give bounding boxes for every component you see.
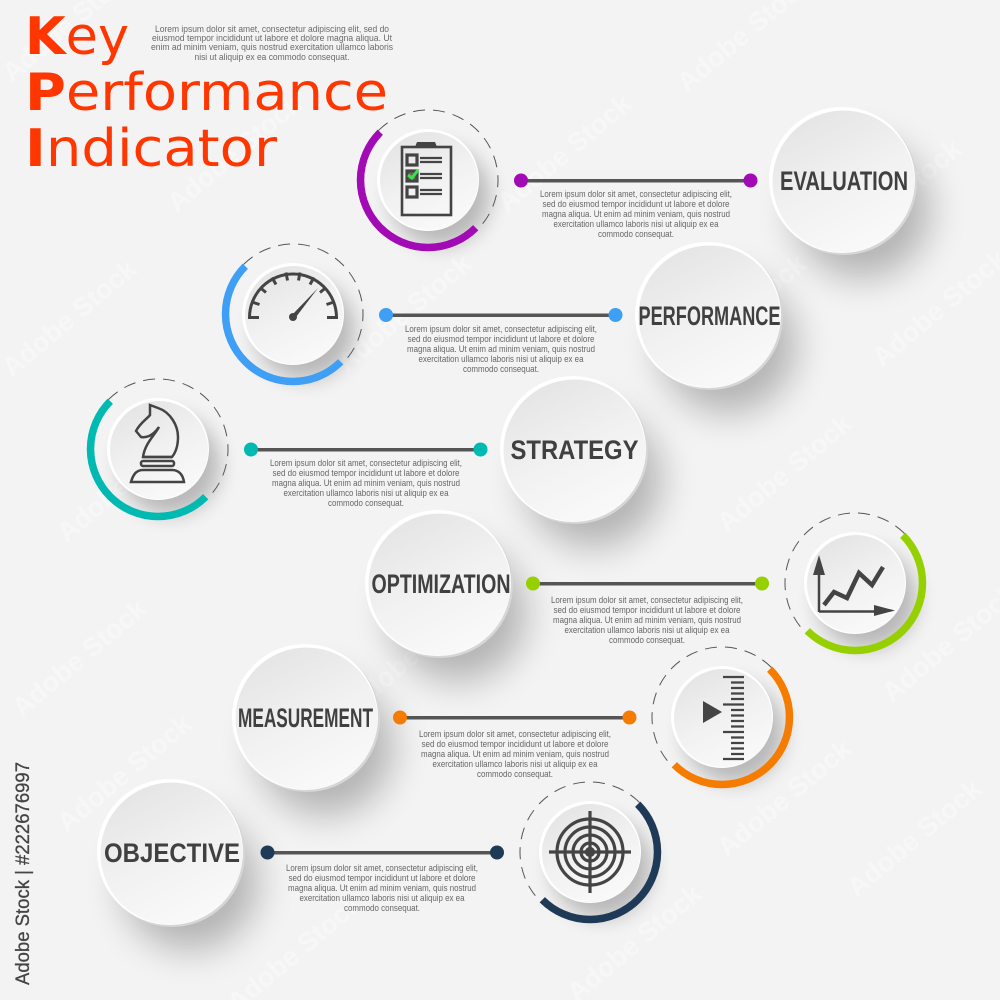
text block: objective	[286, 863, 478, 913]
title: Indicator	[25, 119, 278, 179]
ring icon: line chart	[785, 513, 922, 650]
text block: optimization	[551, 595, 743, 645]
text block: strategy	[270, 458, 462, 508]
intro text block: Lorem ipsum dolor sit amet, consectetur adipiscing elit, sed do	[155, 24, 389, 34]
ring icon: target	[520, 782, 657, 919]
ring icon: chess knight	[91, 379, 228, 516]
text block: evaluation: commodo consequat.	[598, 229, 674, 239]
ring icon: clipboard checklist	[361, 110, 498, 247]
text block: measurement: Lorem ipsum dolor sit amet, consectetur adipiscing elit,	[419, 729, 611, 739]
watermark pattern: Adobe Stock	[711, 408, 858, 538]
intro text block: eiusmod tempor incididunt ut labore et dolore magna aliqua. Ut	[152, 33, 392, 43]
text block: performance	[405, 324, 597, 374]
watermark pattern: Adobe Stock	[341, 588, 488, 718]
text block: evaluation: sed do eiusmod tempor incididunt ut labore et dolore	[542, 199, 730, 209]
big disc: performance: PERFORMANCE	[638, 301, 780, 331]
row: performance	[226, 242, 796, 413]
big disc: optimization: OPTIMIZATION	[372, 569, 510, 599]
stock id label: Adobe Stock | #222676997	[13, 762, 34, 985]
big disc: evaluation: EVALUATION	[780, 166, 908, 196]
connector: evaluation	[514, 174, 758, 188]
title	[25, 7, 388, 179]
big disc: optimization	[365, 510, 526, 681]
connector: objective	[260, 846, 504, 860]
title: Performance	[25, 63, 388, 123]
connector: measurement	[393, 710, 636, 724]
text block: strategy: commodo consequat.	[328, 498, 404, 508]
text block: optimization: magna aliqua. Ut enim ad minim veniam, quis nostrud	[553, 615, 741, 625]
intro text block: enim ad minim veniam, quis nostrud exercitation ullamco laboris	[151, 42, 393, 52]
watermark pattern: Adobe Stock	[161, 88, 308, 218]
watermark pattern: Adobe Stock	[51, 418, 198, 548]
intro text block	[151, 24, 393, 62]
watermark pattern: Adobe Stock	[0, 253, 143, 383]
watermark pattern: Adobe Stock	[841, 773, 988, 903]
text block: evaluation: magna aliqua. Ut enim ad minim veniam, quis nostrud	[542, 209, 730, 219]
text block: measurement: sed do eiusmod tempor incididunt ut labore et dolore	[422, 739, 608, 749]
intro text block: nisi ut aliquip ex ea commodo consequat.	[194, 52, 350, 62]
text block: optimization: exercitation ullamco laboris nisi ut aliquip ex ea	[564, 625, 730, 635]
row: strategy	[91, 376, 661, 547]
big disc: measurement	[232, 644, 393, 815]
text block: strategy: sed do eiusmod tempor incididunt ut labore et dolore	[272, 468, 460, 478]
text block: evaluation: Lorem ipsum dolor sit amet, consectetur adipiscing elit,	[540, 189, 732, 199]
text block: performance: exercitation ullamco laboris nisi ut aliquip ex ea	[418, 354, 584, 364]
big disc: evaluation	[769, 107, 930, 278]
text block: measurement: exercitation ullamco laboris nisi ut aliquip ex ea	[432, 759, 598, 769]
watermark pattern: Adobe Stock	[6, 593, 153, 723]
text block: strategy: magna aliqua. Ut enim ad minim veniam, quis nostrud	[272, 478, 460, 488]
watermark pattern: Adobe Stock	[821, 133, 968, 263]
row: objective	[97, 779, 657, 950]
title: Key	[25, 7, 129, 67]
ring icon: ruler	[652, 647, 789, 784]
text block: performance: Lorem ipsum dolor sit amet, consectetur adipiscing elit,	[405, 324, 597, 334]
big disc: measurement: MEASUREMENT	[238, 703, 373, 733]
row: measurement	[232, 644, 789, 815]
row: evaluation	[361, 107, 930, 278]
watermark pattern: Adobe Stock	[666, 248, 813, 378]
text block: optimization: sed do eiusmod tempor incididunt ut labore et dolore	[554, 605, 740, 615]
watermark pattern: Adobe Stock	[51, 708, 198, 838]
connector: optimization	[526, 576, 769, 590]
text block: performance: sed do eiusmod tempor incididunt ut labore et dolore	[408, 334, 594, 344]
watermark pattern: Adobe Stock	[331, 248, 478, 378]
text block: optimization: commodo consequat.	[609, 635, 685, 645]
text block: objective: commodo consequat.	[344, 903, 420, 913]
text block: optimization: Lorem ipsum dolor sit amet, consectetur adipiscing elit,	[551, 595, 743, 605]
text block: objective: magna aliqua. Ut enim ad minim veniam, quis nostrud	[288, 883, 476, 893]
text block: objective: Lorem ipsum dolor sit amet, consectetur adipiscing elit,	[286, 863, 478, 873]
text block: evaluation	[540, 189, 732, 239]
ring icon: gauge	[226, 244, 363, 381]
text block: objective: sed do eiusmod tempor incididunt ut labore et dolore	[288, 873, 476, 883]
text block: objective: exercitation ullamco laboris nisi ut aliquip ex ea	[300, 893, 464, 903]
text block: strategy: exercitation ullamco laboris nisi ut aliquip ex ea	[284, 488, 448, 498]
text block: measurement: commodo consequat.	[477, 769, 553, 779]
connector: strategy	[244, 442, 488, 456]
text block: strategy: Lorem ipsum dolor sit amet, consectetur adipiscing elit,	[270, 458, 462, 468]
watermark pattern: Adobe Stock	[491, 88, 638, 218]
text block: evaluation: exercitation ullamco laboris nisi ut aliquip ex ea	[554, 219, 718, 229]
text block: performance: commodo consequat.	[463, 364, 539, 374]
big disc: strategy	[500, 376, 661, 547]
text block: performance: magna aliqua. Ut enim ad minim veniam, quis nostrud	[407, 344, 595, 354]
big disc: strategy: STRATEGY	[510, 435, 638, 465]
text block: measurement: magna aliqua. Ut enim ad minim veniam, quis nostrud	[421, 749, 609, 759]
watermark pattern: Adobe Stock	[711, 733, 858, 863]
connector: performance	[379, 308, 622, 322]
text block: measurement	[419, 729, 611, 779]
row: optimization	[365, 510, 922, 681]
big disc: objective	[97, 779, 258, 950]
big disc: performance	[635, 242, 796, 413]
big disc: objective: OBJECTIVE	[104, 838, 240, 868]
